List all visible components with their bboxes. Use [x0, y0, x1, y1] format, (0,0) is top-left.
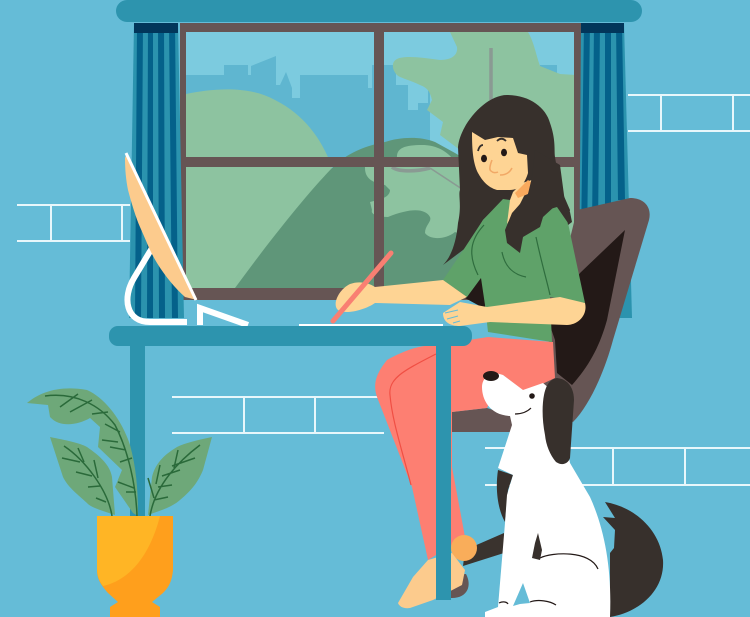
left curtain	[129, 23, 184, 318]
nose and mouth	[490, 160, 512, 175]
curtain body	[579, 23, 632, 318]
window	[180, 23, 581, 300]
chair seat	[452, 408, 515, 432]
pot highlight	[97, 516, 160, 586]
eyebrows	[478, 139, 506, 151]
pants seam	[390, 354, 436, 485]
foot	[398, 553, 465, 608]
chair back	[540, 198, 650, 422]
desk top white edge	[299, 324, 443, 326]
window frame	[180, 23, 581, 300]
shirt creases	[472, 225, 550, 295]
window view: light green hill	[186, 89, 332, 290]
right leaf	[148, 437, 212, 515]
dog body	[482, 373, 610, 617]
dog ear	[543, 378, 574, 464]
writing arm	[336, 280, 467, 312]
dog	[482, 371, 663, 617]
window view: tree trunk and branch	[392, 48, 491, 171]
pants	[375, 337, 555, 560]
curtain body	[129, 23, 184, 318]
eyes	[481, 149, 507, 162]
monitor edge	[126, 153, 196, 300]
chair leg	[463, 533, 504, 566]
curtain header	[581, 23, 624, 33]
window view: city skyline	[186, 56, 557, 160]
window view: thin branch	[430, 168, 465, 191]
monitor stand	[127, 248, 248, 325]
dog back spot	[497, 470, 513, 522]
pot	[97, 516, 173, 617]
woman	[333, 95, 586, 608]
computer monitor	[125, 153, 248, 325]
ankle	[451, 535, 477, 561]
hair lock over shirt	[505, 150, 572, 253]
chair foot	[448, 574, 469, 598]
window view: lower tree foliage	[365, 167, 475, 240]
desk leg left	[130, 344, 145, 516]
dog mouth and leg lines	[499, 408, 598, 605]
shirt	[443, 199, 585, 342]
window view: pale building	[408, 85, 428, 110]
neck shadow	[515, 180, 532, 198]
right curtain	[579, 23, 632, 318]
brick outlines on wall	[17, 95, 750, 485]
hair back	[443, 95, 570, 265]
finger lines	[445, 310, 460, 323]
dog tail	[603, 502, 663, 617]
window view: light arc inside the hill	[397, 145, 452, 158]
curtain header	[134, 23, 178, 33]
pencil	[333, 253, 391, 321]
resting arm and hand	[443, 297, 586, 326]
face	[472, 132, 528, 190]
top leaf	[27, 388, 138, 516]
monitor screen	[125, 153, 197, 300]
left leaf	[50, 437, 115, 515]
desk top	[109, 326, 472, 346]
curtain rod	[116, 0, 642, 22]
curtain folds	[135, 23, 178, 318]
chair	[448, 198, 650, 598]
chair back cushion	[548, 230, 625, 385]
potted plant	[27, 388, 212, 617]
dog leg shadow	[532, 533, 542, 560]
window view: dark green hill	[235, 138, 475, 288]
desk leg right	[436, 344, 451, 600]
gap between dog legs	[513, 583, 530, 606]
curtain folds	[581, 23, 625, 240]
dog nose	[483, 371, 499, 381]
window view: upper tree	[393, 32, 576, 288]
dog eye	[529, 393, 535, 399]
window view: sky	[184, 30, 576, 292]
desk	[109, 325, 472, 600]
neck	[507, 180, 532, 224]
leaf veins	[45, 394, 200, 516]
chair gap under sleeve	[465, 275, 487, 310]
